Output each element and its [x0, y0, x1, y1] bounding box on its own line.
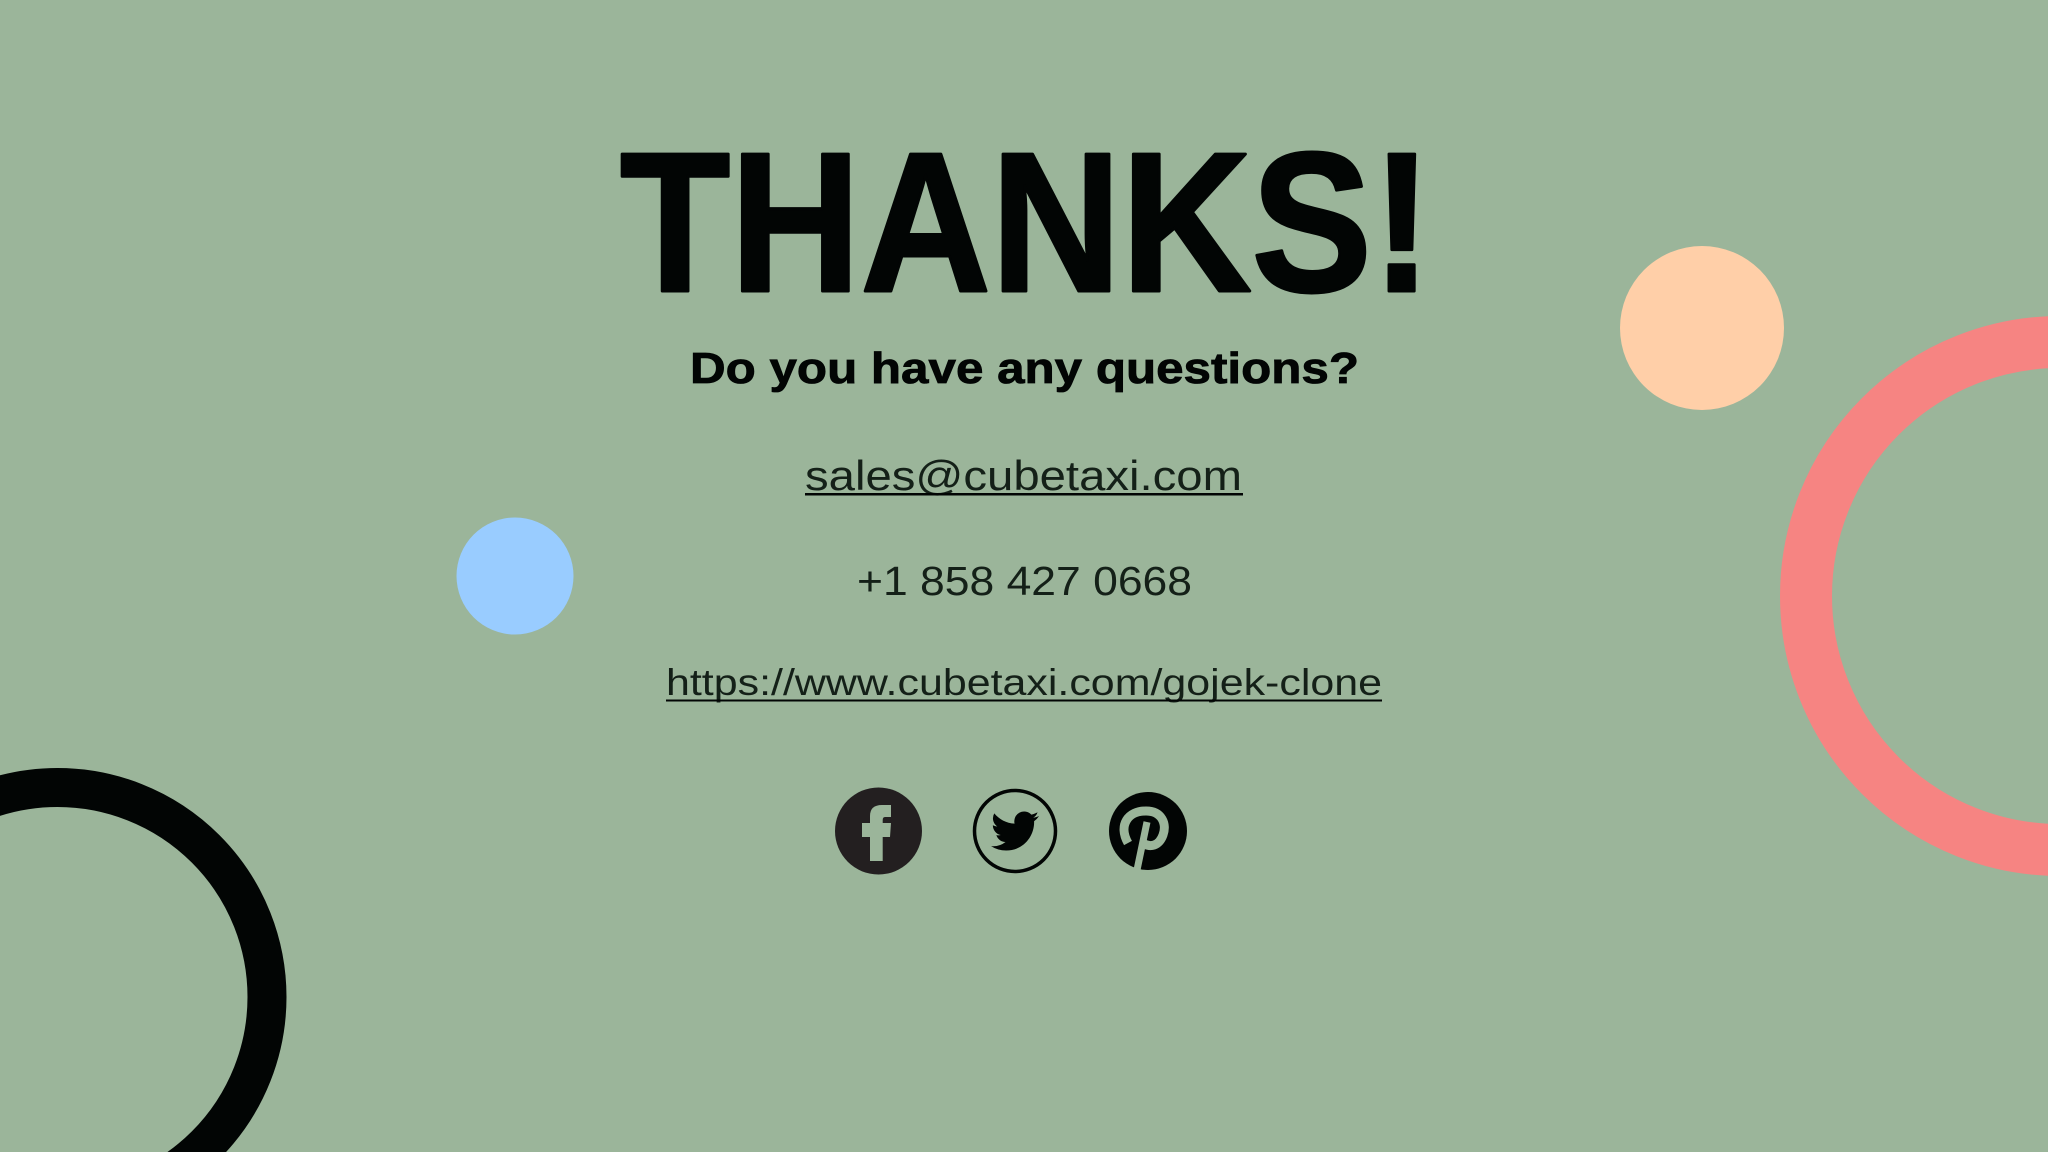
title: THANKS! — [620, 112, 1432, 334]
pink ring — [1806, 342, 2048, 850]
icon: pinterest — [1109, 792, 1187, 870]
website link: https://www.cubetaxi.com/gojek-clone — [666, 662, 1382, 703]
phone number: +1 858 427 0668 — [857, 558, 1192, 604]
icon: twitter — [974, 790, 1056, 872]
subheading: Do you have any questions? — [690, 344, 1359, 393]
email link: sales@cubetaxi.com — [805, 452, 1242, 499]
black ring — [0, 788, 267, 1152]
blue circle — [456, 518, 574, 634]
icon: facebook — [835, 788, 922, 874]
peach circle — [1620, 246, 1784, 410]
